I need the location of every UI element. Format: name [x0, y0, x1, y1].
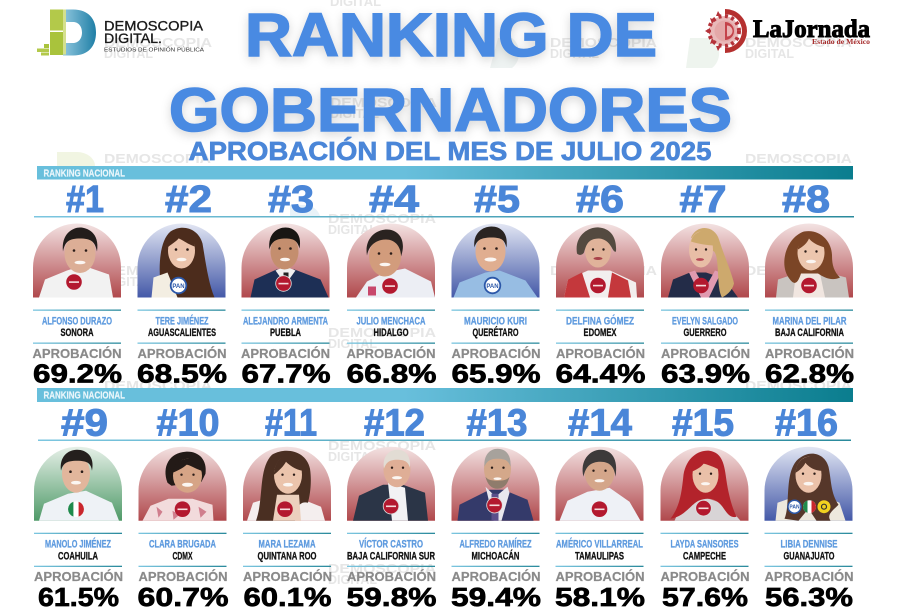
rank numbers row 2: #11: [265, 402, 317, 444]
card 1: SONORA: [60, 327, 94, 339]
card 15: LAYDA SANSORES: [670, 539, 738, 551]
card 4: [346, 224, 436, 388]
rank numbers row 1: #1: [66, 179, 104, 221]
rank numbers row 1: #7: [680, 179, 726, 221]
card 5: APROBACIÓN: [452, 346, 540, 361]
card 7: [661, 224, 750, 388]
card 9: MANOLO JIMÉNEZ: [45, 538, 111, 551]
card 5: [452, 224, 540, 388]
watermarks: DIGITAL: [745, 47, 794, 61]
card 15: APROBACIÓN: [660, 569, 749, 584]
watermarks: DIGITAL: [104, 275, 153, 289]
logo: La Jornada: [705, 9, 870, 53]
watermarks: DIGITAL: [328, 337, 377, 351]
card 7: APROBACIÓN: [661, 346, 750, 361]
logo wordmark: [104, 18, 204, 54]
rank numbers row 2: #9: [61, 402, 108, 444]
card 14: APROBACIÓN: [556, 569, 644, 584]
watermarks: DEMOSCOPIA: [104, 379, 212, 393]
card 6: [556, 224, 646, 388]
card 5: PAN: [486, 284, 499, 290]
card 4: APROBACIÓN: [346, 346, 435, 361]
banner: ranking nacional 1: [37, 166, 853, 180]
watermarks: DEMOSCOPIA: [104, 264, 212, 278]
card 1: ALFONSO DURAZO: [42, 316, 112, 328]
watermarks: DEMOSCOPIA: [745, 152, 852, 166]
card 14: TAMAULIPAS: [575, 551, 624, 563]
card 3: ALEJANDRO ARMENTA: [243, 316, 328, 328]
rank numbers row 1: #2: [165, 179, 212, 221]
card 8: [765, 224, 854, 388]
logo wordmark: LaJornada: [753, 16, 870, 43]
rank numbers row 1: #4: [369, 179, 419, 221]
subtitle: APROBACIÓN DEL MES DE JULIO 2025: [188, 136, 712, 166]
card 10: CDMX: [172, 551, 193, 563]
card 1: APROBACIÓN: [32, 346, 121, 361]
logo wordmark: DEMOSCOPIA: [104, 18, 204, 34]
rank numbers row 1: #5: [474, 179, 520, 221]
watermarks: DEMOSCOPIA: [745, 264, 852, 278]
card 10: CLARA BRUGADA: [149, 539, 216, 551]
card 2: PAN: [172, 284, 185, 290]
card 16: [764, 447, 854, 611]
watermarks: DEMOSCOPIA: [104, 36, 212, 50]
card 8: BAJA CALIFORNIA: [775, 327, 844, 339]
card 15: CAMPECHE: [683, 551, 726, 563]
title: RANKING DE: [245, 1, 657, 69]
card 14: AMÉRICO VILLARREAL: [556, 538, 643, 551]
watermarks: DEMOSCOPIA: [328, 562, 436, 576]
card 1: [32, 224, 122, 388]
watermarks: DEMOSCOPIA: [550, 36, 657, 50]
card 3: PUEBLA: [270, 327, 301, 339]
card 5: QUERÉTARO: [472, 326, 519, 339]
card 7: GUERRERO: [684, 327, 727, 339]
card 13: ALFREDO RAMÍREZ: [460, 538, 532, 551]
card 2: TERE JIMÉNEZ: [156, 314, 209, 328]
card 5: MAURICIO KURI: [464, 316, 527, 328]
watermarks: DEMOSCOPIA: [745, 379, 852, 393]
rank numbers row 1: #6: [576, 179, 624, 221]
watermarks: DIGITAL: [104, 47, 153, 61]
watermarks: DIGITAL: [328, 573, 377, 587]
watermarks: DEMOSCOPIA: [104, 152, 211, 166]
rank numbers row 2: [38, 402, 851, 444]
card 8: APROBACIÓN: [765, 346, 854, 361]
watermarks: DEMOSCOPIA: [745, 36, 852, 50]
title: [169, 1, 732, 144]
icon: Demoscopia D mark: [37, 10, 96, 56]
card 6: EDOMEX: [584, 327, 617, 339]
banner: ranking nacional 1: RANKING NACIONAL: [44, 168, 125, 180]
card 16: APROBACIÓN: [764, 569, 853, 584]
card 10: APROBACIÓN: [138, 569, 227, 584]
watermarks: DEMOSCOPIA: [550, 264, 657, 278]
card 7: EVELYN SALGADO: [672, 316, 738, 328]
card 3: [241, 224, 330, 388]
card 5: 65.9%: [452, 358, 540, 388]
card 12: VÍCTOR CASTRO: [359, 538, 423, 551]
logo wordmark: DIGITAL.: [104, 30, 162, 46]
rank numbers row 2: #13: [466, 402, 528, 444]
card 3: APROBACIÓN: [241, 346, 330, 361]
card 16: LIBIA DENNISE: [780, 539, 838, 551]
watermarks: DIGITAL: [328, 223, 377, 237]
rank numbers row 1: [34, 179, 854, 221]
logo: Demoscopia Digital: [37, 10, 204, 56]
card 4: HIDALGO: [374, 327, 409, 339]
card 13: MICHOACÁN: [472, 550, 520, 563]
rank numbers row 2: #15: [672, 402, 734, 444]
logo wordmark: ESTUDIOS DE OPINIÓN PÚBLICA: [104, 46, 204, 54]
watermarks: DEMOSCOPIA: [328, 212, 436, 226]
card 2: APROBACIÓN: [138, 346, 226, 361]
card 6: DELFINA GÓMEZ: [566, 314, 634, 328]
watermarks: DEMOSCOPIA: [328, 326, 436, 340]
card 11: [243, 447, 332, 611]
rank numbers row 1: #3: [268, 179, 314, 221]
rank numbers row 1: #8: [782, 179, 830, 221]
card 16: PAN: [789, 505, 800, 511]
card 9: [34, 447, 123, 611]
watermarks: DIGITAL: [328, 450, 377, 464]
card 11: APROBACIÓN: [243, 569, 332, 584]
card 9: APROBACIÓN: [34, 569, 123, 584]
card 11: MARA LEZAMA: [258, 539, 316, 551]
card 8: MARINA DEL PILAR: [772, 316, 847, 328]
rank numbers row 2: #10: [156, 402, 220, 444]
card 13: APROBACIÓN: [452, 569, 540, 584]
card 4: JULIO MENCHACA: [356, 316, 426, 328]
card 10: [138, 447, 228, 611]
watermarks: DEMOSCOPIA: [330, 96, 437, 110]
watermarks: DEMOSCOPIA: [328, 439, 436, 453]
logo subtitle: Estado de México: [812, 37, 870, 46]
card 12: [346, 447, 436, 611]
rank numbers row 2: #14: [568, 402, 632, 444]
card 3: 67.7%: [242, 358, 330, 388]
banner: ranking nacional 2: [37, 388, 853, 402]
rank numbers row 2: #12: [364, 402, 425, 444]
banner: ranking nacional 2: RANKING NACIONAL: [44, 390, 125, 402]
card 13: [451, 447, 541, 611]
card 12: APROBACIÓN: [347, 569, 436, 584]
rank numbers row 2: #16: [775, 402, 838, 444]
card 15: [660, 447, 750, 611]
icon: La Jornada sun: [705, 9, 747, 53]
title: GOBERNADORES: [169, 76, 732, 144]
card 1: 69.2%: [33, 358, 122, 388]
card 2: [137, 224, 227, 388]
card 11: QUINTANA ROO: [258, 551, 317, 563]
card 9: COAHUILA: [58, 551, 98, 563]
card 8: 62.8%: [765, 358, 854, 388]
card 2: AGUASCALIENTES: [148, 327, 216, 339]
watermarks: DIGITAL: [550, 47, 599, 61]
card 12: BAJA CALIFORNIA SUR: [347, 551, 435, 563]
card 6: APROBACIÓN: [556, 346, 645, 361]
watermarks: DIGITAL: [330, 107, 379, 121]
card 7: 63.9%: [661, 358, 750, 388]
card 2: 68.5%: [137, 358, 227, 388]
card 14: [555, 447, 645, 611]
card 4: 66.8%: [346, 358, 436, 388]
card 16: GUANAJUATO: [784, 551, 835, 563]
card 6: 64.4%: [556, 358, 646, 388]
